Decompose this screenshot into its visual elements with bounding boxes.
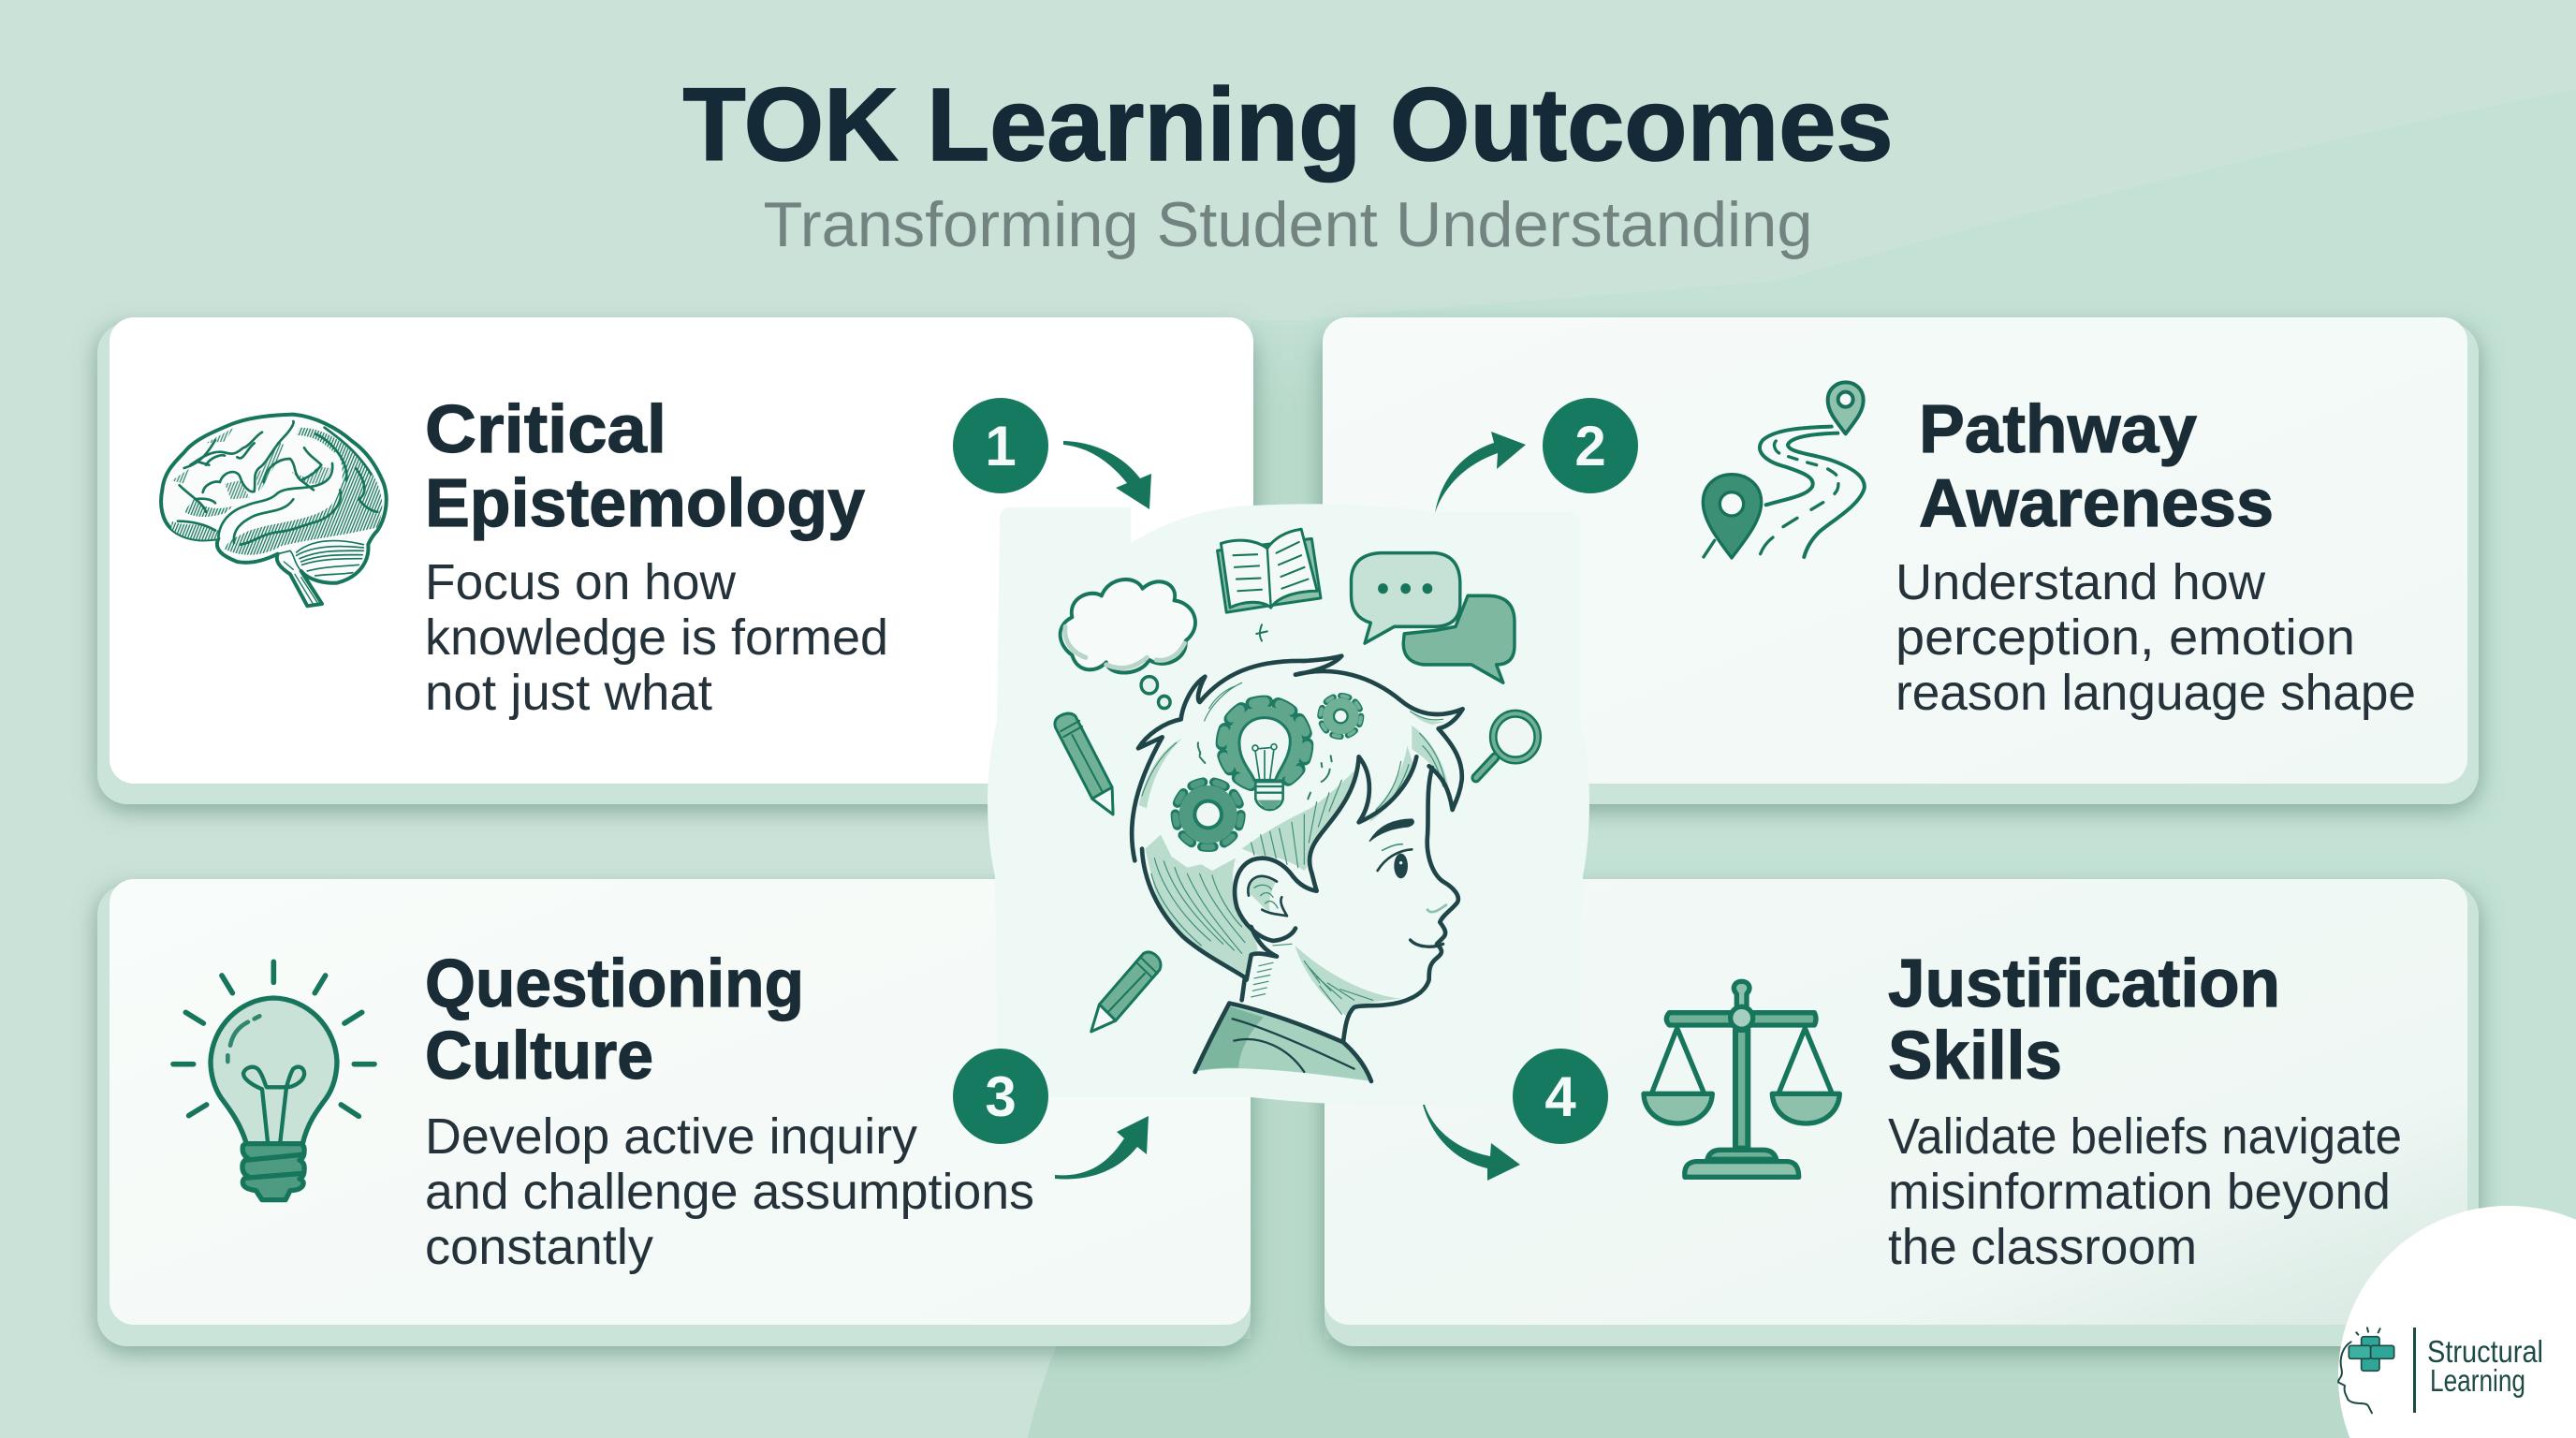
icon: speech bubbles	[1352, 553, 1515, 682]
logo icon: head with blocks	[2338, 1328, 2394, 1413]
badge 4	[1513, 1049, 1608, 1144]
icon: gear with light bulb	[1222, 702, 1307, 810]
heading: justification skills: Justification	[1888, 946, 2280, 1021]
icon: brain	[161, 415, 387, 606]
heading: critical epistemology: Critical	[425, 392, 666, 467]
arrow: centre to badge 2	[1435, 432, 1526, 513]
logo wordmark: Structural	[2427, 1334, 2543, 1369]
icon: light bulb	[173, 961, 374, 1200]
icon: open book	[1218, 529, 1321, 612]
arrow: badge 1 to centre	[1063, 441, 1151, 509]
text: questioning culture description: Develop active inquiry	[425, 1108, 917, 1165]
center illustration backdrop	[988, 504, 1589, 1106]
text: critical epistemology description: not just what	[425, 665, 712, 721]
heading: questioning culture: Culture	[425, 1019, 653, 1093]
panel: critical epistemology	[97, 317, 1253, 804]
icon: pencil lower	[1091, 952, 1161, 1032]
ear	[1248, 875, 1287, 916]
text: questioning culture description: and challenge assumptions	[425, 1164, 1034, 1220]
icon: sparkle	[1256, 624, 1267, 641]
icon: gear small	[1321, 696, 1361, 737]
hair hatching	[1142, 682, 1446, 1014]
text: pathway awareness description: perception, emotion	[1895, 609, 2355, 666]
text: pathway awareness description: Understand how	[1895, 554, 2266, 610]
icon: balance scales	[1644, 981, 1839, 1177]
badge 3: 3	[985, 1065, 1017, 1128]
badge 1: 1	[985, 415, 1017, 477]
text: pathway awareness description: reason language shape	[1895, 665, 2416, 721]
text: questioning culture description: constantly	[425, 1219, 653, 1275]
heading: justification skills: Skills	[1888, 1019, 2062, 1093]
icon: magnifying glass	[1476, 713, 1538, 778]
icon: gear left	[1176, 782, 1241, 847]
heading: pathway awareness: Pathway	[1919, 392, 2197, 467]
hair marks	[1198, 742, 1332, 799]
logo divider	[2413, 1328, 2416, 1413]
icon: winding path with map pins	[1703, 382, 1865, 558]
heading: pathway awareness: Awareness	[1919, 466, 2274, 541]
illustration: boy head in profile	[1132, 656, 1463, 1081]
icon: pencil upper	[1055, 713, 1113, 814]
panel: justification skills	[1325, 879, 2479, 1346]
face features	[1369, 819, 1446, 946]
shirt	[1195, 1004, 1371, 1081]
logo: structural learning	[2338, 1206, 2576, 1438]
logo wordmark: Learning	[2430, 1363, 2525, 1398]
panel: pathway awareness	[1323, 317, 2479, 804]
badge 2: 2	[1574, 415, 1606, 477]
badge 1	[953, 398, 1048, 493]
head outline	[1132, 656, 1463, 1042]
illustration: floating idea icons	[1055, 529, 1538, 1032]
title: TOK Learning Outcomes	[683, 67, 1893, 183]
text: critical epistemology description: knowledge is formed	[425, 609, 888, 666]
text: justification skills description: misinformation beyond	[1888, 1164, 2391, 1220]
text: justification skills description: the classroom	[1888, 1219, 2197, 1275]
heading: critical epistemology: Epistemology	[425, 466, 865, 541]
subtitle: Transforming Student Understanding	[764, 189, 1812, 260]
text: justification skills description: Validate beliefs navigate	[1888, 1108, 2402, 1165]
text: critical epistemology description: Focus on how	[425, 554, 737, 610]
arrow: badge 3 to centre	[1055, 1116, 1149, 1179]
heading: questioning culture: Questioning	[425, 946, 804, 1021]
icon: thought cloud	[1061, 580, 1195, 709]
badge 4: 4	[1544, 1065, 1576, 1128]
badge 3	[953, 1049, 1048, 1144]
panel: questioning culture	[97, 879, 1251, 1346]
badge 2	[1543, 398, 1638, 493]
arrow: centre to badge 4	[1423, 1105, 1520, 1181]
hair and neck shading	[1139, 713, 1451, 1018]
